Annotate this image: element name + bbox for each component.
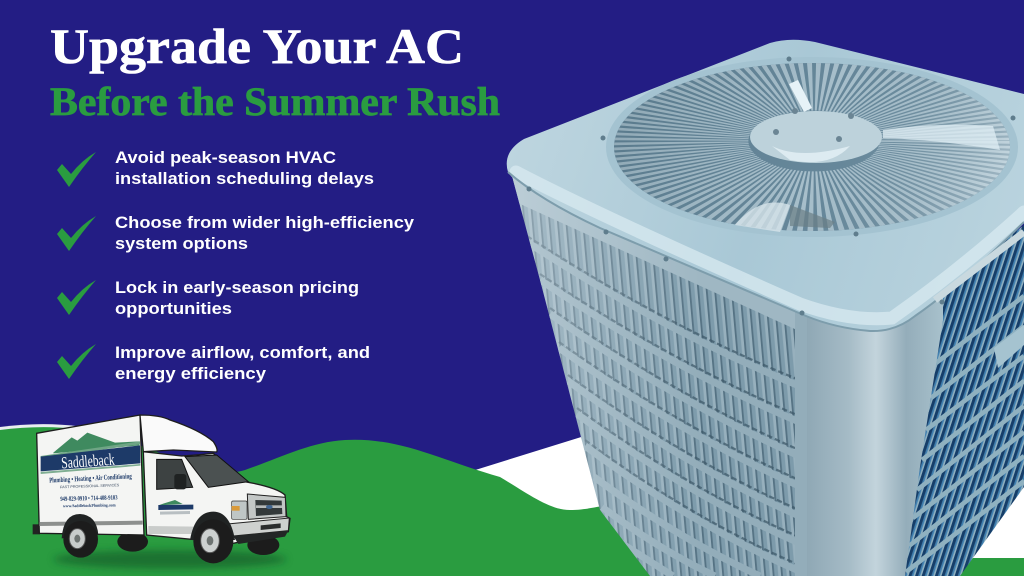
fan hub bbox=[750, 108, 882, 163]
front wheel bbox=[190, 512, 235, 563]
bumper bbox=[227, 518, 289, 544]
lid screws bbox=[526, 56, 1016, 316]
benefit 3 bbox=[57, 278, 359, 318]
rear wheels bbox=[33, 524, 279, 555]
cargo box: FAST PROFESSIONAL SERVICES bbox=[60, 483, 120, 489]
corner panel bbox=[807, 296, 943, 576]
headlight bbox=[232, 501, 247, 519]
right louvered face bbox=[895, 225, 1024, 576]
benefit 4 bbox=[57, 343, 370, 383]
cab bbox=[143, 452, 290, 543]
cargo box bbox=[37, 415, 144, 535]
delivery truck bbox=[33, 415, 290, 569]
benefit 1: installation scheduling delays bbox=[115, 169, 374, 188]
benefit 4: energy efficiency bbox=[115, 364, 267, 383]
cargo box: www.SaddlebackPlumbing.com bbox=[63, 502, 116, 508]
door logo bbox=[158, 500, 193, 515]
side window bbox=[157, 459, 193, 489]
left louvered face bbox=[505, 170, 810, 576]
benefit 1 bbox=[57, 148, 374, 188]
air conditioner unit bbox=[505, 40, 1024, 576]
rear wheel bbox=[62, 514, 98, 558]
lid bbox=[507, 40, 1024, 331]
benefit 2: system options bbox=[115, 234, 248, 253]
benefit 4: Improve airflow, comfort, and bbox=[115, 343, 370, 362]
brand name: Saddleback bbox=[61, 450, 116, 472]
benefit 3: opportunities bbox=[115, 299, 232, 318]
ground shadow bbox=[53, 550, 287, 569]
fan grille bbox=[606, 57, 1018, 237]
phone numbers: 949-829-0910 • 714-408-9103 bbox=[60, 494, 118, 503]
blue band bbox=[41, 445, 140, 471]
mirror bbox=[174, 474, 186, 489]
benefit 2 bbox=[57, 213, 415, 253]
windshield bbox=[185, 455, 248, 487]
cab roof cap bbox=[140, 415, 217, 452]
grille bbox=[247, 494, 286, 519]
services line: Plumbing • Heating • Air Conditioning bbox=[49, 471, 132, 485]
benefit 3: Lock in early-season pricing bbox=[115, 278, 359, 297]
subtitle: Before the Summer Rush bbox=[50, 79, 500, 124]
benefit 2: Choose from wider high-efficiency bbox=[115, 213, 415, 232]
mountain logo bbox=[53, 433, 139, 453]
title: Upgrade Your AC bbox=[50, 18, 464, 74]
benefit 1: Avoid peak-season HVAC bbox=[115, 148, 336, 167]
